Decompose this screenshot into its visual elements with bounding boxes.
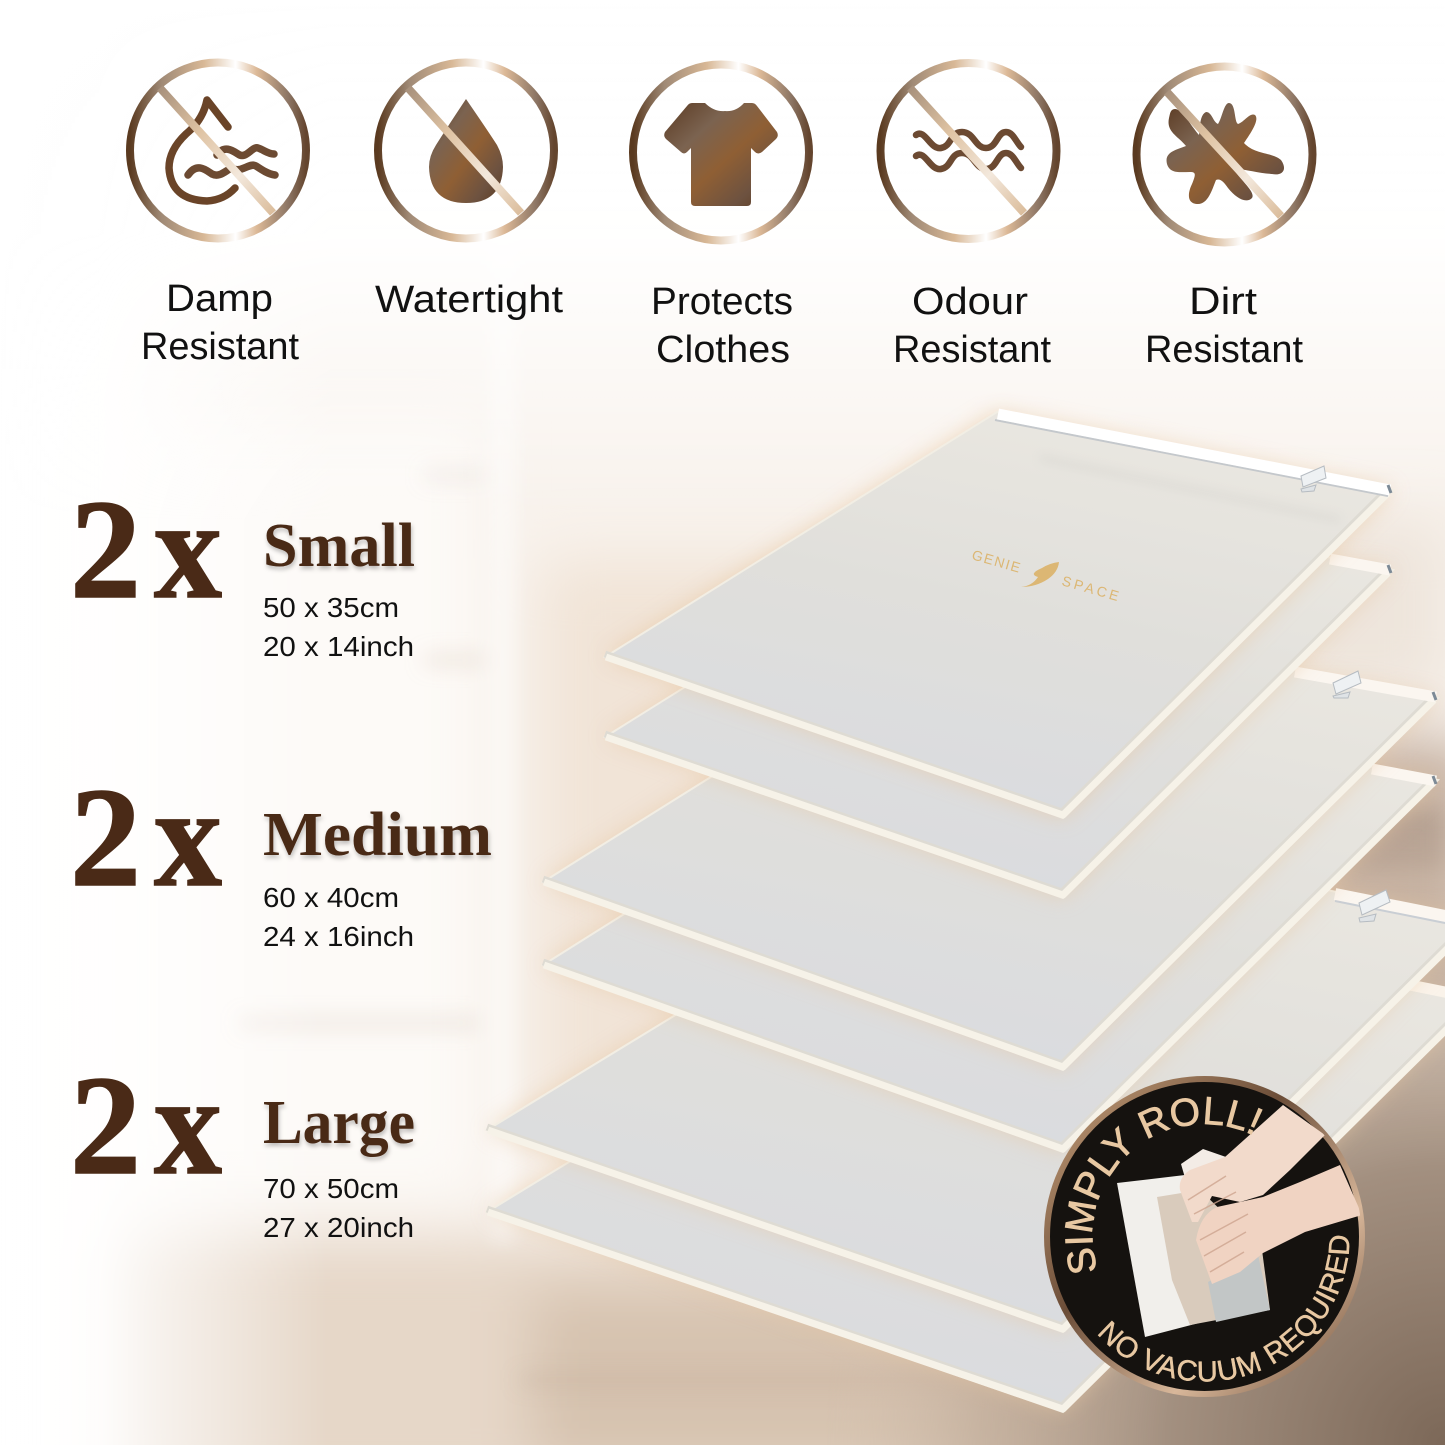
size row: large: 2 xyxy=(70,1046,141,1204)
brand logo xyxy=(970,547,1124,605)
icon: protects clothes xyxy=(633,64,809,240)
captions xyxy=(141,278,1303,371)
size row: small: 20 x 14inch xyxy=(263,631,414,662)
size row: medium xyxy=(70,758,492,952)
size row: large xyxy=(70,1046,415,1243)
size row: small: x xyxy=(154,470,222,628)
caption: watertight: Watertight xyxy=(375,279,563,321)
caption: damp resistant: Resistant xyxy=(141,326,299,368)
caption: odour resistant xyxy=(893,281,1051,371)
bag: small 2 xyxy=(605,492,1393,898)
size row: medium: 60 x 40cm xyxy=(263,882,399,913)
caption: odour resistant: Resistant xyxy=(893,329,1051,371)
illustration: hands rolling bag xyxy=(1117,1105,1362,1337)
bag: small 1 with logo xyxy=(605,412,1393,818)
arc text: simply roll: SIMPLY ROLL! xyxy=(1064,1096,1263,1273)
size row: large: x xyxy=(154,1046,222,1204)
caption: odour resistant: Odour xyxy=(912,281,1028,323)
caption: protects clothes xyxy=(651,281,793,371)
caption: protects clothes: Clothes xyxy=(656,329,790,371)
icon: watertight xyxy=(378,62,554,238)
stack of storage bags xyxy=(487,412,1445,1412)
zip slider xyxy=(1359,890,1390,922)
size row: small xyxy=(70,470,415,662)
bag: medium 2 xyxy=(543,690,1438,1152)
size row: large: Large xyxy=(263,1089,415,1157)
size row: medium: 2 xyxy=(70,758,141,916)
size row: small: 50 x 35cm xyxy=(263,592,399,623)
caption: damp resistant xyxy=(141,278,299,368)
badge: simply roll xyxy=(1044,1076,1365,1397)
zip slider xyxy=(1333,671,1361,698)
size row: large: 70 x 50cm xyxy=(263,1173,399,1204)
caption: protects clothes: Protects xyxy=(651,281,793,323)
brand logo: SPACE xyxy=(1060,573,1124,605)
size row: medium: x xyxy=(154,758,222,916)
size row: large: 27 x 20inch xyxy=(263,1212,414,1243)
bag: large 1 xyxy=(487,820,1445,1332)
size row: small: Small xyxy=(263,512,415,580)
icon: odour resistant xyxy=(880,63,1056,239)
size row: small: 2 xyxy=(70,470,141,628)
brand logo: GENIE xyxy=(970,547,1024,576)
icon: dirt resistant xyxy=(1136,66,1312,242)
size row: medium: 24 x 16inch xyxy=(263,921,414,952)
caption: dirt resistant: Resistant xyxy=(1145,329,1303,371)
size row: medium: Medium xyxy=(263,801,492,869)
caption: dirt resistant xyxy=(1145,281,1303,371)
bag: medium 1 xyxy=(543,608,1438,1070)
arc text: no vacuum required: NO VACUUM REQUIRED xyxy=(1098,1236,1350,1382)
icon: damp resistant xyxy=(130,62,306,238)
caption: damp resistant: Damp xyxy=(166,278,273,320)
bag: large 2 xyxy=(487,902,1445,1412)
caption: dirt resistant: Dirt xyxy=(1189,281,1257,323)
zip slider xyxy=(1301,466,1326,492)
